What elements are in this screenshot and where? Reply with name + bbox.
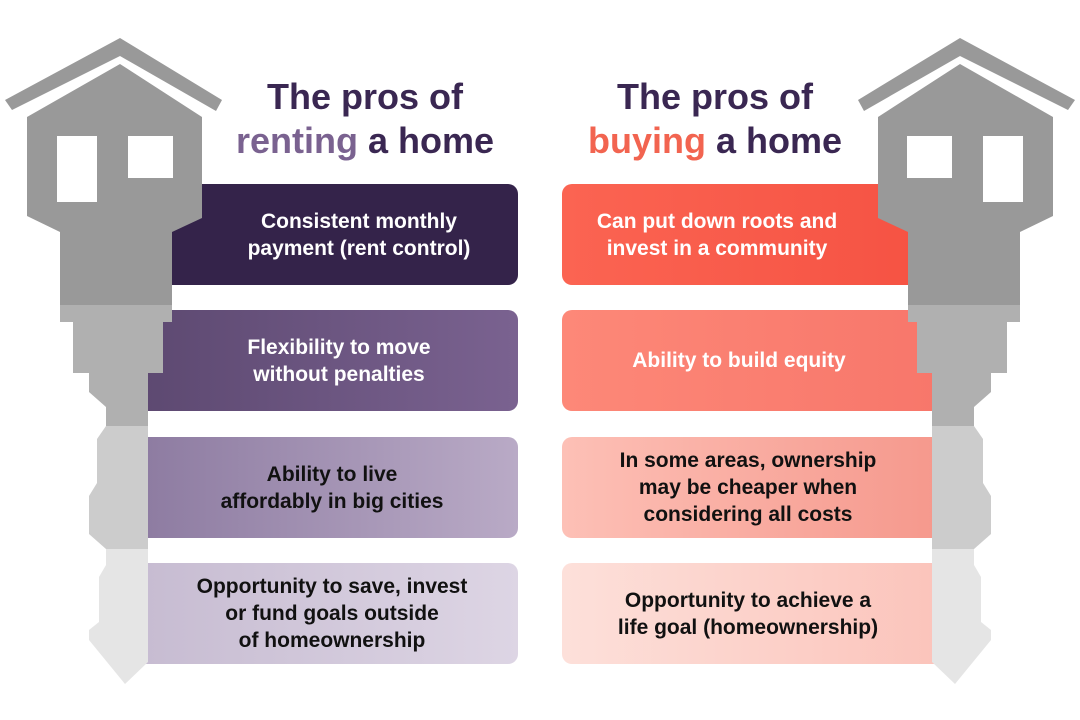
- box: renting 4: of homeownership: [239, 629, 425, 652]
- title: buying: [588, 76, 842, 161]
- box: buying 4: [562, 563, 952, 664]
- box: buying 2: [562, 310, 952, 411]
- box: buying 2: Ability to build equity: [632, 349, 846, 372]
- box: renting 1: Consistent monthly: [261, 210, 457, 232]
- box: buying 3: In some areas, ownership: [620, 449, 876, 472]
- box: buying 3: considering all costs: [644, 503, 852, 526]
- title: buying: buying a home: [588, 120, 842, 161]
- box: buying 3: [562, 437, 952, 538]
- box: renting 3: [130, 437, 518, 538]
- title: buying: The pros of: [617, 76, 813, 117]
- box: buying 1: Can put down roots and: [597, 210, 837, 232]
- title: renting: renting a home: [236, 120, 494, 161]
- box: renting 2: Flexibility to move: [247, 336, 431, 358]
- box: renting 3: affordably in big cities: [221, 490, 443, 512]
- title: renting: [236, 76, 494, 161]
- box: buying 4: life goal (homeownership): [618, 616, 878, 638]
- title: renting: The pros of: [267, 76, 463, 117]
- box: buying 1: [562, 184, 952, 285]
- box: renting 1: [130, 184, 518, 285]
- box: renting 4: [130, 563, 518, 664]
- box: buying 3: may be cheaper when: [639, 476, 857, 499]
- box: buying 4: Opportunity to achieve a: [625, 588, 871, 612]
- box: renting 4: or fund goals outside: [225, 602, 439, 625]
- box: renting 1: payment (rent control): [248, 236, 470, 260]
- box: renting 2: without penalties: [253, 362, 425, 386]
- box: buying 1: invest in a community: [607, 236, 827, 260]
- box: renting 4: Opportunity to save, invest: [197, 575, 467, 598]
- box: renting 3: Ability to live: [267, 462, 397, 486]
- box: renting 2: [130, 310, 518, 411]
